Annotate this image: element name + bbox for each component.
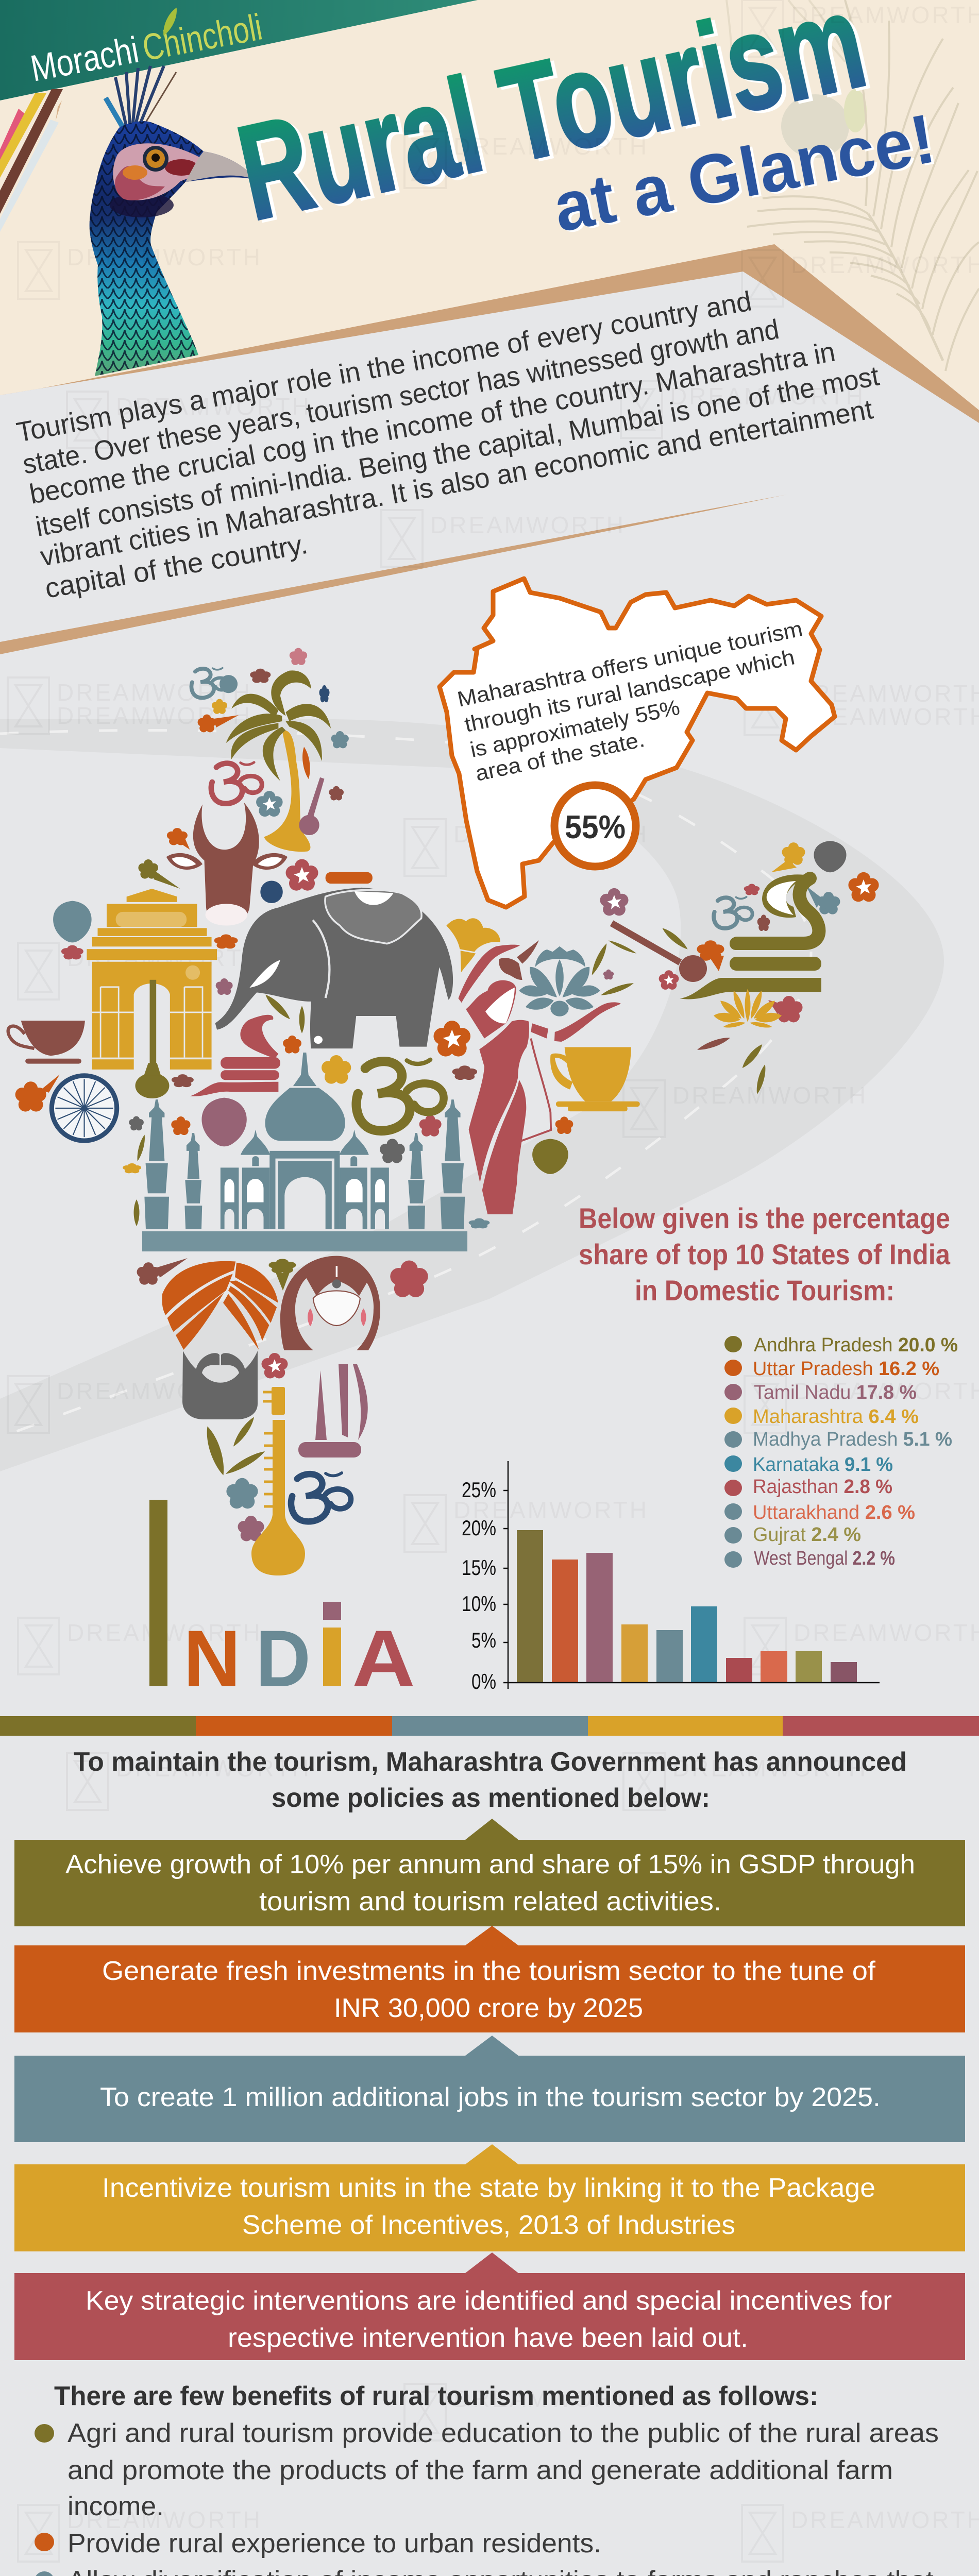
icon: taj mahal <box>142 1053 467 1251</box>
om dot <box>220 675 238 693</box>
neck scales <box>90 121 204 376</box>
chart bars <box>517 1530 857 1682</box>
raised arm <box>458 945 520 1003</box>
letter D: D <box>256 1614 311 1704</box>
intro paragraph: state. Over these years, tourism sector has witnessed growth and <box>20 314 782 480</box>
intro paragraph: capital of the country. <box>43 529 310 604</box>
policy box 1 <box>14 1819 965 1926</box>
pallu outline <box>521 1039 551 1141</box>
header cream background <box>0 0 979 428</box>
55% badge <box>554 785 636 867</box>
chart y axis labels: 15% <box>462 1555 496 1580</box>
watermarks: DREAMWORTH <box>67 2506 262 2533</box>
policies heading <box>74 1747 907 1813</box>
face <box>485 988 515 1023</box>
icon: orange leaf <box>301 747 312 779</box>
face patch <box>113 143 202 200</box>
icon: tanpura mauve <box>299 777 325 835</box>
minarets <box>144 1099 169 1229</box>
icon: flowers north <box>138 648 349 889</box>
benefit 1: income. <box>67 2492 164 2521</box>
benefit 2: Provide rural experience to urban residents. <box>67 2529 601 2558</box>
benefit 1: and promote the products of the farm and generate additional farm <box>67 2455 893 2485</box>
policy box 1: tourism and tourism related activities. <box>259 1887 721 1917</box>
watermarks: DREAMWORTH <box>116 1755 311 1782</box>
letter A: A <box>352 1614 415 1704</box>
icon: leaf <box>160 6 180 37</box>
chart axes <box>503 1461 880 1689</box>
legend item: Tamil Nadu: Tamil Nadu 17.8 % <box>754 1382 917 1403</box>
icon: small flowers centre <box>15 935 477 1173</box>
legend item: Gujrat: Gujrat 2.4 % <box>753 1524 861 1546</box>
small windows <box>252 1156 357 1166</box>
icon: india gate <box>87 889 217 1070</box>
earring left <box>308 1309 313 1326</box>
chart y axis labels: 25% <box>462 1478 496 1502</box>
policy box 2: INR 30,000 crore by 2025 <box>334 1993 643 2023</box>
domestic tourism heading: share of top 10 States of India <box>579 1238 951 1270</box>
watermarks: DREAMWORTH <box>672 1755 868 1782</box>
chart y axis labels: 20% <box>462 1516 496 1540</box>
icon: palm tree <box>226 670 331 852</box>
icon: om blue <box>192 668 228 698</box>
icon: leaves south <box>202 1415 266 1477</box>
letter I short <box>323 1628 341 1686</box>
icon: cup brown <box>8 1021 85 1064</box>
intro paragraph: Tourism plays a major role in the income of every country and <box>14 285 754 448</box>
benefits heading: There are few benefits of rural tourism mentioned as follows: <box>54 2381 818 2411</box>
main dome <box>265 1088 345 1141</box>
pencils <box>0 89 63 232</box>
peacock feather decoration <box>727 0 979 371</box>
legend item: Uttar Pradesh: Uttar Pradesh 16.2 % <box>753 1358 939 1380</box>
base <box>142 1231 467 1251</box>
lower arches <box>225 1209 385 1229</box>
watermarks: DREAMWORTH <box>453 821 649 848</box>
legend item: Madhya Pradesh: Madhya Pradesh 5.1 % <box>753 1429 952 1450</box>
icon: om navy <box>291 1473 351 1521</box>
policy box 3 <box>14 2036 965 2142</box>
icon: ashoka chakra <box>52 1076 117 1141</box>
policy box 4: Incentivize tourism units in the state by linking it to the Package <box>102 2173 875 2203</box>
55% value: 55% <box>565 808 626 845</box>
intro paragraph: itself consists of mini-India. Being the capital, Mumbai is one of the most <box>33 360 882 543</box>
icon: cow <box>166 803 288 926</box>
legend item: West Bengal: West Bengal 2.2 % <box>754 1548 895 1569</box>
letter N: N <box>183 1614 241 1704</box>
domestic tourism heading: in Domestic Tourism: <box>635 1274 894 1307</box>
cheek red <box>165 159 198 176</box>
face orange <box>115 166 165 200</box>
watermarks: DREAMWORTH <box>670 383 865 410</box>
bar chart <box>462 1461 880 1693</box>
Taj Mahal and portraits group <box>142 1053 467 1350</box>
icon: star flower orange <box>433 1021 470 1057</box>
legend <box>724 1334 958 1569</box>
legend item: Maharashtra: Maharashtra 6.4 % <box>753 1406 919 1428</box>
icon: turban <box>162 1261 278 1350</box>
icon: sitar brown <box>612 923 707 982</box>
icon: lotus teal <box>519 946 600 1016</box>
chart y axis labels: 10% <box>462 1591 496 1616</box>
benefit 1 <box>35 2418 939 2521</box>
icon: yellow cup <box>550 1047 640 1111</box>
earring right <box>361 1309 366 1326</box>
map text: through its rural landscape which <box>462 645 797 737</box>
icon: tabla <box>298 1364 368 1458</box>
policy box 5: Key strategic interventions are identified and special incentives for <box>86 2286 892 2316</box>
intro panel tan edge <box>0 244 979 428</box>
peacock illustration <box>90 66 256 376</box>
cheek orange <box>123 165 147 180</box>
icon: lotus yellow <box>713 989 782 1029</box>
bindi ornament <box>332 1279 341 1289</box>
policy box 3: To create 1 million additional jobs in the tourism sector by 2025. <box>100 2082 881 2112</box>
colour band <box>0 1716 979 1736</box>
policy box 2: Generate fresh investments in the tourism sector to the tune of <box>102 1956 876 1986</box>
banner text: Morachi: Morachi <box>27 29 142 90</box>
legend item: Uttarakhand: Uttarakhand 2.6 % <box>753 1502 915 1523</box>
legend item: Karnataka: Karnataka 9.1 % <box>753 1454 893 1476</box>
white arched windows <box>225 1179 385 1202</box>
India map icons: north and centre <box>8 648 477 1173</box>
dancer figure <box>458 945 621 1214</box>
icon: shell mauve <box>201 1098 247 1146</box>
policy box 4: Scheme of Incentives, 2013 of Industries <box>242 2210 735 2240</box>
intro paragraph: become the crucial cog in the income of the country. Maharashtra in <box>27 336 838 510</box>
forearm <box>554 1002 621 1042</box>
watermarks: DREAMWORTH <box>67 944 262 971</box>
intro paragraph: vibrant cities in Maharashtra. It is also an economic and entertainment <box>38 394 875 572</box>
intro paragraph <box>14 285 882 604</box>
side dome right <box>340 1130 369 1155</box>
watermarks: DREAMWORTH <box>430 512 626 538</box>
pupil <box>151 154 160 162</box>
beak <box>185 151 256 182</box>
watermarks: DREAMWORTH <box>453 1497 649 1523</box>
icon: om olive <box>357 1060 444 1131</box>
icon: leaves <box>136 992 305 1162</box>
watermarks: DREAMWORTH <box>453 2385 649 2412</box>
icon: sitar olive <box>135 980 169 1098</box>
upper arm <box>531 1023 548 1039</box>
orange pill <box>326 872 373 884</box>
policy box 5: respective intervention have been laid out. <box>228 2323 748 2353</box>
subtitle: at a Glance!: at a Glance! <box>548 99 941 247</box>
chart y axis labels <box>462 1478 496 1693</box>
icon: om east <box>714 897 752 928</box>
icon: snake red <box>190 1015 280 1096</box>
navy dot <box>260 881 283 903</box>
icon: shell teal <box>53 901 92 942</box>
icon: elephant <box>215 888 453 1048</box>
road background <box>0 719 944 1471</box>
policies heading: some policies as mentioned below: <box>272 1783 710 1813</box>
chart y axis labels: 0% <box>471 1669 496 1693</box>
domestic tourism heading <box>579 1202 951 1307</box>
icon: leaf west <box>134 1199 139 1226</box>
map outline <box>440 579 835 907</box>
icon: east flowers and leaves <box>532 841 879 1174</box>
lower tan strip <box>0 495 787 654</box>
side dome left <box>241 1130 270 1155</box>
legend item: Andhra Pradesh: Andhra Pradesh 20.0 % <box>754 1334 958 1356</box>
icon: sitar yellow <box>251 1387 305 1575</box>
woman face <box>313 1291 360 1326</box>
icon: yellow flower with cone <box>446 918 500 972</box>
watermarks: DREAMWORTH <box>67 1619 262 1646</box>
dancer, lotus and cup group <box>446 918 640 1214</box>
watermarks: DREAMWORTH <box>672 1082 868 1109</box>
icon: south flowers <box>137 1218 490 1541</box>
India lettering <box>149 1500 415 1704</box>
policy box 2 <box>14 1926 965 2032</box>
hair parting <box>336 1266 337 1277</box>
icon: star flower teal <box>256 791 283 817</box>
letter I dot <box>323 1602 341 1620</box>
benefit 1: Agri and rural tourism provide education to the public of the rural areas <box>67 2418 939 2448</box>
neck and head <box>90 121 256 376</box>
watermarks: DREAMWORTH <box>453 133 649 160</box>
policy box 1: Achieve growth of 10% per annum and share of 15% in GSDP through <box>65 1850 915 1879</box>
map text <box>455 616 805 786</box>
icon: woman hair <box>280 1256 380 1350</box>
crest feathers <box>106 66 176 129</box>
wings <box>221 1167 389 1229</box>
policy box 5 <box>14 2252 965 2360</box>
legend item: Rajasthan: Rajasthan 2.8 % <box>753 1476 892 1498</box>
torso and sari <box>469 1020 529 1183</box>
chart y axis labels: 5% <box>471 1628 496 1652</box>
watermarks: DREAMWORTH <box>57 702 252 729</box>
veil <box>466 980 516 1039</box>
watermarks: DREAMWORTH <box>116 393 311 420</box>
watermarks: DREAMWORTH <box>67 244 262 270</box>
map text: area of the state. <box>473 727 647 786</box>
brand banner <box>0 0 478 100</box>
finial <box>293 1053 316 1086</box>
icon: star flower red <box>286 859 318 891</box>
map text: is approximately 55% <box>468 695 682 762</box>
Maharashtra map callout <box>440 579 835 907</box>
icon: snake olive <box>680 874 821 999</box>
throat shadow <box>110 193 174 217</box>
eye <box>143 146 168 172</box>
iris <box>146 149 165 168</box>
watermarks: DREAMWORTH <box>57 1378 252 1404</box>
map text: Maharashtra offers unique tourism <box>455 616 805 711</box>
icon: om red <box>211 762 262 804</box>
watermarks: DREAMWORTH <box>57 679 252 706</box>
icon: man beard <box>182 1351 258 1419</box>
policies heading: To maintain the tourism, Maharashtra Government has announced <box>74 1747 907 1777</box>
central block <box>269 1151 340 1229</box>
icon: brown flower with cone <box>499 940 539 980</box>
intro panel <box>0 272 979 670</box>
banner text: Chincholi: Chincholi <box>139 6 265 69</box>
lower skirt <box>482 1080 526 1214</box>
policy box 4 <box>14 2144 965 2251</box>
letter I tall <box>149 1500 167 1686</box>
